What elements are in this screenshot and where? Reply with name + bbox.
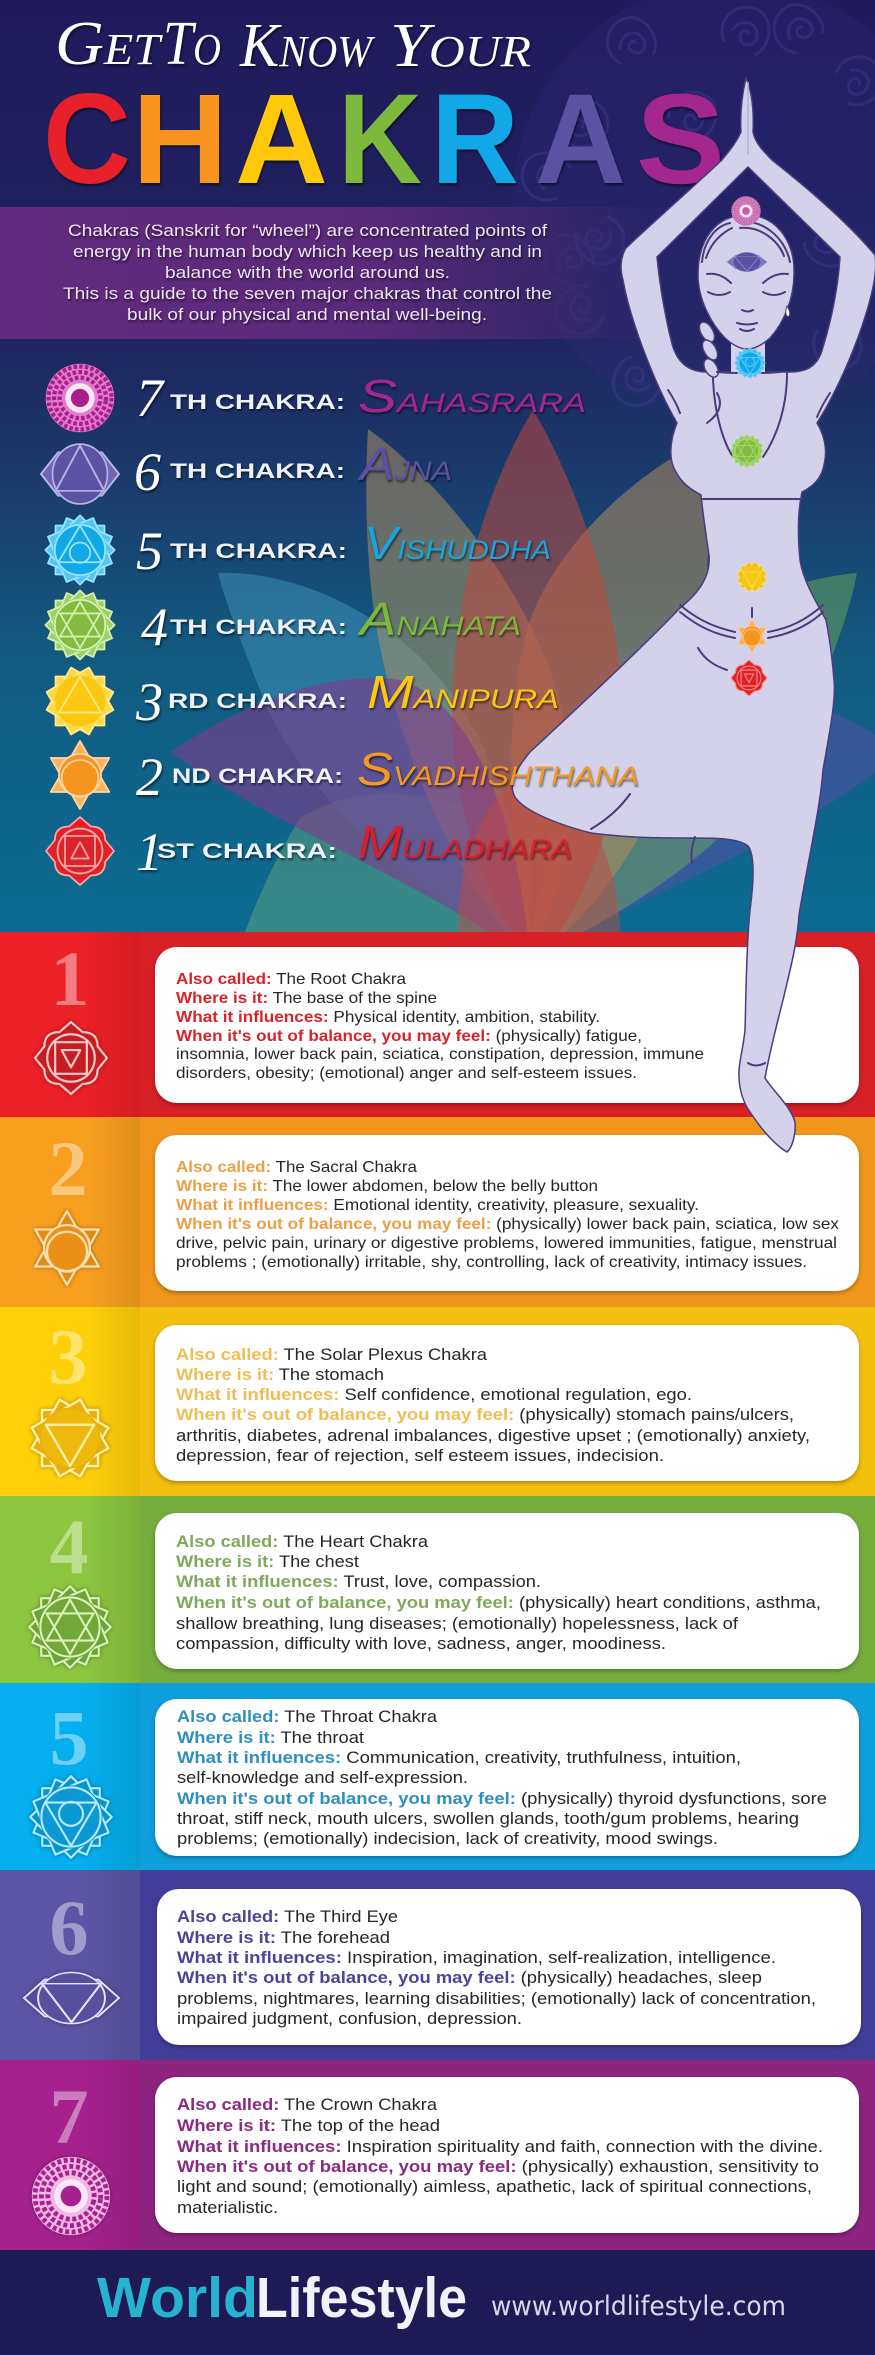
row: 6th chakra: 6 <box>134 442 161 502</box>
row: 2nd chakra: SVADHISHTHANA <box>357 743 639 795</box>
card: chakra 2 text: What it influences: Emotional identity, creativity, pleasure, sexuality. <box>176 1197 699 1214</box>
row: 1st chakra: 1 <box>136 822 163 882</box>
card: chakra 5 text: Where is it: The throat <box>177 1729 364 1747</box>
card: chakra 2 text: problems ; (emotionally) irritable, shy, controlling, lack of creativity, intimacy issues. <box>176 1254 807 1271</box>
card: chakra 4 text <box>155 1513 859 1669</box>
row: 5th chakra: VISHUDDHA <box>364 517 551 569</box>
figure: woman in tree pose <box>512 78 875 1152</box>
title: chakras: A <box>535 68 626 211</box>
band 3: yellow <box>0 1307 875 1496</box>
head and hair <box>698 215 794 349</box>
row: 7th chakra: 7 <box>136 368 165 428</box>
marker: throat <box>735 348 765 378</box>
title: chakras: H <box>132 68 228 211</box>
body silhouette <box>512 78 875 1152</box>
band 7: purple <box>0 2060 875 2250</box>
card: chakra 3 text <box>155 1325 859 1481</box>
marker: crown <box>731 196 761 226</box>
row: 5th chakra <box>45 515 551 585</box>
intro panel: energy in the human body which keep us healthy and in <box>73 242 542 261</box>
icon: sacral chakra <box>35 1211 99 1285</box>
row: 3rd chakra <box>47 666 559 734</box>
card: chakra 4 text: What it influences: Trust, love, compassion. <box>176 1573 541 1591</box>
intro panel: This is a guide to the seven major chakras that control the <box>63 284 552 303</box>
number 6: 6 <box>50 1884 88 1971</box>
card: chakra 7 text: materialistic. <box>177 2199 278 2217</box>
icon: solar plexus chakra <box>32 1400 108 1476</box>
marker: heart <box>731 435 763 467</box>
card: chakra 4 text: Also called: The Heart Chakra <box>176 1533 429 1551</box>
card: chakra 3 text: Also called: The Solar Plexus Chakra <box>176 1346 488 1364</box>
card: chakra 5 text: throat, stiff neck, mouth ulcers, swollen glands, tooth/gum problems, hearing <box>177 1810 799 1828</box>
band 1: red <box>0 932 875 1117</box>
row: 5th chakra: 5 <box>136 521 163 581</box>
card: chakra 1 text: disorders, obesity; (emotional) anger and self-esteem issues. <box>176 1065 637 1082</box>
number 4: 4 <box>50 1503 88 1590</box>
marker: solar plexus <box>737 562 767 592</box>
title: get to know your: KNOW <box>239 12 375 80</box>
band 6: indigo <box>0 1870 875 2060</box>
card: chakra 1 text: Also called: The Root Chakra <box>176 971 406 988</box>
band 2: orange <box>0 1117 875 1307</box>
card: chakra 6 text: problems, nightmares, learning disabilities; (emotionally) lack of concentration, <box>177 1990 816 2008</box>
card: chakra 4 text: When it's out of balance, you may feel: (physically) heart conditions, asthma, <box>176 1594 821 1612</box>
figure detail lines <box>591 82 830 1066</box>
title: get to know your: GET <box>55 10 164 78</box>
intro panel <box>0 207 665 339</box>
row: 3rd chakra: 3 <box>135 672 163 732</box>
card: chakra 6 text <box>157 1889 861 2045</box>
row: 2nd chakra <box>51 741 639 809</box>
card: chakra 1 text: insomnia, lower back pain, sciatica, constipation, depression, immune <box>176 1046 704 1063</box>
page background <box>0 0 875 940</box>
band 4: green <box>0 1496 875 1683</box>
card: chakra 5 text <box>155 1699 859 1856</box>
card: chakra 6 text: Also called: The Third Eye <box>177 1908 398 1926</box>
card: chakra 5 text: self-knowledge and self-expression. <box>177 1769 468 1787</box>
chakra list <box>41 364 639 885</box>
icon: third eye chakra <box>24 1972 119 2024</box>
card: chakra 3 text: depression, fear of rejection, self esteem issues, indecision. <box>176 1447 664 1465</box>
band 5: blue <box>0 1683 875 1870</box>
card: chakra 2 text: When it's out of balance, you may feel: (physically) lower back pain, sciatica, low sex <box>176 1216 839 1233</box>
row: 3rd chakra: RD CHAKRA: <box>168 690 347 713</box>
number 2: 2 <box>48 1125 88 1212</box>
row: 4th chakra <box>45 590 521 660</box>
card: chakra 3 text: What it influences: Self confidence, emotional regulation, ego. <box>176 1386 692 1404</box>
row: 7th chakra: S AHASRARA <box>358 370 586 422</box>
row: 6th chakra: AJNA <box>357 438 452 490</box>
card: chakra 5 text: What it influences: Communication, creativity, truthfulness, intuition, <box>177 1749 741 1767</box>
card: chakra 1 text: Where is it: The base of the spine <box>176 990 437 1007</box>
card: chakra 7 text: When it's out of balance, you may feel: (physically) exhaustion, sensitivity to <box>177 2158 819 2176</box>
icon: root chakra <box>35 1022 107 1094</box>
card: chakra 6 text: What it influences: Inspiration, imagination, self-realization, intelligence. <box>177 1949 776 1967</box>
title: chakras: A <box>235 68 328 211</box>
row: 6th chakra <box>41 438 452 504</box>
number 1: 1 <box>50 935 90 1022</box>
card: chakra 7 text: Also called: The Crown Chakra <box>177 2096 438 2114</box>
row: 4th chakra: 4 <box>141 597 168 657</box>
title: chakras: S <box>636 68 725 211</box>
row: 1st chakra <box>46 816 572 885</box>
title: get to know your <box>55 10 531 80</box>
card: chakra 2 text: Where is it: The lower abdomen, below the belly button <box>176 1178 598 1195</box>
row: 7th chakra: TH CHAKRA: <box>170 391 345 414</box>
title: chakras <box>43 68 725 211</box>
card: chakra 1 text: When it's out of balance, you may feel: (physically) fatigue, <box>176 1028 642 1045</box>
title: chakras: R <box>431 68 519 211</box>
footer <box>0 2250 875 2355</box>
row: 5th chakra: TH CHAKRA: <box>170 540 347 563</box>
row: 7th chakra <box>46 364 586 432</box>
row: 2nd chakra: 2 <box>136 747 163 807</box>
neck <box>706 335 790 378</box>
card: chakra 3 text: Where is it: The stomach <box>176 1366 384 1384</box>
card: chakra 1 text <box>155 947 859 1103</box>
card: chakra 7 text: What it influences: Inspiration spirituality and faith, connection with the divine. <box>177 2138 823 2156</box>
card: chakra 6 text: impaired judgment, confusion, depression. <box>177 2010 522 2028</box>
card: chakra 6 text: Where is it: The forehead <box>177 1929 390 1947</box>
marker: root <box>731 660 767 696</box>
row: 6th chakra: TH CHAKRA: <box>170 460 345 483</box>
title: chakras: K <box>338 68 422 211</box>
website url: www.worldlifestyle.com <box>491 2291 786 2322</box>
card: chakra 5 text: Also called: The Throat Chakra <box>177 1708 438 1726</box>
decorative mandala circle <box>513 0 875 419</box>
marker: sacral <box>738 620 766 652</box>
card: chakra 7 text <box>155 2077 859 2233</box>
number 3: 3 <box>48 1313 88 1400</box>
row: 4th chakra: TH CHAKRA: <box>170 616 347 639</box>
row: 3rd chakra: M ANIPURA <box>367 666 559 718</box>
card: chakra 4 text: Where is it: The chest <box>176 1553 359 1571</box>
icon: throat chakra <box>30 1776 112 1858</box>
icon: heart chakra <box>29 1586 111 1668</box>
marker: third eye <box>727 252 767 272</box>
card: chakra 3 text: arthritis, diabetes, adrenal imbalances, digestive upset ; (emotionally) anxiety, <box>176 1427 810 1445</box>
card: chakra 5 text: problems; (emotionally) indecision, lack of creativity, mood swings. <box>177 1830 718 1848</box>
braid <box>696 319 721 380</box>
card: chakra 6 text: When it's out of balance, you may feel: (physically) headaches, sleep <box>177 1969 762 1987</box>
chakra markers on body <box>727 196 767 696</box>
card: chakra 3 text: When it's out of balance, you may feel: (physically) stomach pains/ulcers, <box>176 1406 794 1424</box>
intro panel: balance with the world around us. <box>165 263 450 282</box>
title: get to know your: TO <box>163 10 221 78</box>
card: chakra 2 text <box>155 1135 859 1291</box>
card: chakra 1 text: What it influences: Physical identity, ambition, stability. <box>176 1009 600 1026</box>
card: chakra 7 text: light and sound; (emotionally) aimless, apathetic, lack of spiritual connections, <box>177 2178 812 2196</box>
intro panel: Chakras (Sanskrit for “wheel”) are concentrated points of <box>68 221 547 240</box>
card: chakra 7 text: Where is it: The top of the head <box>177 2117 440 2135</box>
icon: crown chakra <box>32 2157 110 2235</box>
number 7: 7 <box>50 2073 88 2160</box>
row: 1st chakra: MULADHARA <box>358 816 572 868</box>
logo: WorldLifestyle: Lifestyle <box>256 2266 467 2330</box>
row: 4th chakra: ANAHATA <box>356 593 521 645</box>
card: chakra 5 text: When it's out of balance, you may feel: (physically) thyroid dysfunctions, sore <box>177 1790 827 1808</box>
card: chakra 4 text: shallow breathing, lung diseases; (emotionally) hopelessness, lack of <box>176 1615 738 1633</box>
title: chakras: C <box>43 68 131 211</box>
card: chakra 4 text: compassion, difficulty with love, sadness, anger, moodiness. <box>176 1635 666 1653</box>
logo: WorldLifestyle <box>97 2266 467 2330</box>
logo: WorldLifestyle: World <box>97 2266 258 2330</box>
number 5: 5 <box>50 1694 88 1781</box>
row: 2nd chakra: ND CHAKRA: <box>172 765 343 788</box>
row: 1st chakra: ST CHAKRA: <box>157 840 337 863</box>
lotus flower petals <box>170 410 875 960</box>
title: get to know your: YOUR <box>390 12 531 80</box>
card: chakra 2 text: drive, pelvic pain, urinary or digestive problems, lowered immunities, fatigue, menstrual <box>176 1235 837 1252</box>
card: chakra 2 text: Also called: The Sacral Chakra <box>176 1159 417 1176</box>
intro panel: bulk of our physical and mental well-being. <box>127 305 487 324</box>
